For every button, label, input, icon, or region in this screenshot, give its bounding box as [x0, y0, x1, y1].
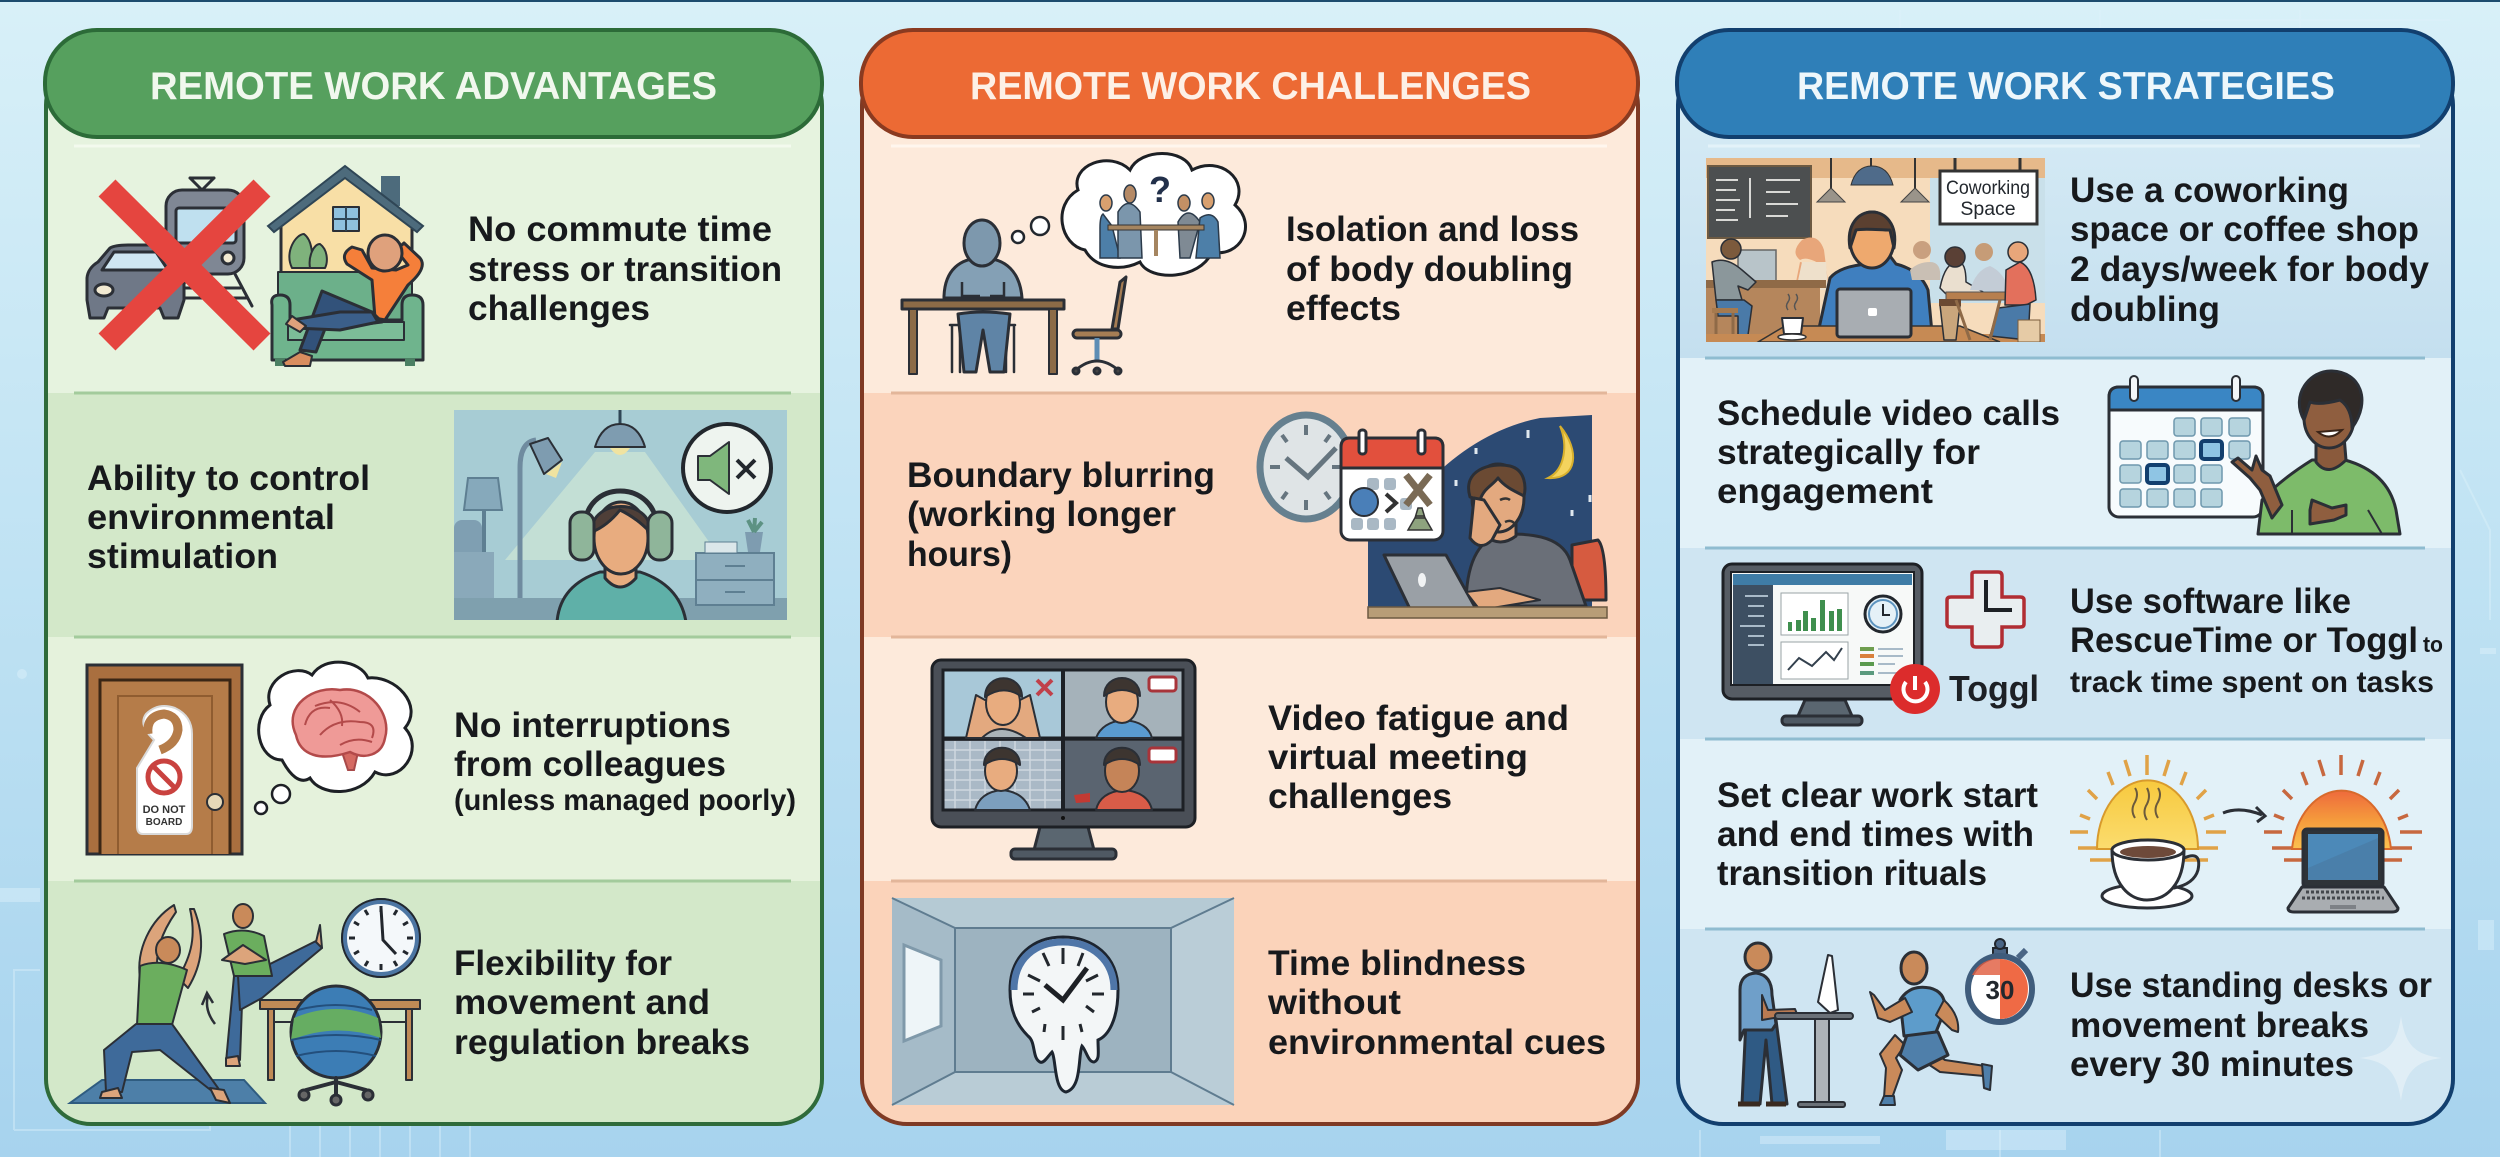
text: start and end: and end times with	[1717, 815, 2034, 854]
text: coworking: Use a coworking	[2070, 171, 2349, 210]
illustration: video call fatigue monitor	[932, 660, 1195, 859]
panel: strategies	[1676, 30, 2456, 1126]
text: start and end	[1717, 776, 2038, 893]
illustration: quiet room with headphones	[454, 410, 787, 622]
icon: muted speaker	[683, 424, 771, 512]
icon: door hanger and brain thought: DO NOT	[143, 804, 186, 816]
text: video calls	[1717, 394, 2060, 511]
text: flexibility: Flexibility for	[454, 944, 672, 983]
text: isolation: effects	[1286, 289, 1401, 328]
text: video fatigue: virtual meeting	[1268, 738, 1528, 777]
text: time blindness	[1267, 944, 1606, 1062]
text: isolation	[1286, 210, 1579, 328]
icon: morning coffee to laptop	[2070, 755, 2422, 912]
sign: coworking space	[1940, 158, 2037, 224]
illustration: time tracking dashboard	[1723, 564, 2039, 725]
sign: coworking space: Space	[1960, 198, 2016, 220]
icon: 30 minute stopwatch	[1968, 939, 2032, 1022]
text: flexibility	[454, 944, 750, 1062]
text: no commute	[468, 210, 782, 328]
text: video fatigue: Video fatigue and	[1268, 699, 1569, 738]
text: no commute: stress or transition	[468, 250, 782, 289]
icon: no commute, relaxing at home	[87, 166, 423, 366]
icon: isolated worker imagining a team: ?	[1149, 169, 1171, 210]
text: software: RescueTime or Toggl	[2070, 621, 2418, 660]
text: environmental control: environmental	[87, 498, 335, 537]
text: software: track time spent on tasks	[2070, 666, 2434, 699]
panel: challenges	[860, 30, 1640, 1126]
advantages header: REMOTE WORK ADVANTAGES	[150, 65, 717, 108]
illustration: melting clock in empty room	[892, 898, 1234, 1105]
text: boundary blurring: Boundary blurring	[907, 456, 1215, 495]
text: video calls: Schedule video calls	[1717, 394, 2060, 433]
sign: coworking space: Coworking	[1946, 177, 2030, 199]
text: software	[2070, 582, 2443, 699]
icon: toggl logo	[1890, 664, 2039, 714]
text: environmental control: Ability to control	[87, 459, 370, 498]
text: video calls: engagement	[1717, 472, 1933, 511]
text: time blindness: environmental cues	[1268, 1023, 1606, 1062]
text: isolation: Isolation and loss	[1286, 210, 1579, 249]
strategies header	[1677, 30, 2453, 137]
icon: movement and exercise ball	[70, 899, 420, 1105]
text: environmental control: stimulation	[87, 537, 278, 576]
text: no commute: No commute time	[468, 210, 772, 249]
text: coworking: space or coffee shop	[2070, 210, 2419, 249]
text: standing desks: Use standing desks or	[2070, 966, 2432, 1005]
text: standing desks	[2070, 966, 2432, 1084]
text: software: to	[2423, 632, 2443, 657]
text: coworking: 2 days/week for body	[2070, 250, 2430, 289]
icon: toggl logo: Toggl	[1949, 668, 2039, 709]
text: video fatigue	[1268, 699, 1569, 816]
text: coworking	[2070, 171, 2430, 329]
text: no commute: challenges	[468, 289, 650, 328]
text: video calls: strategically for	[1717, 433, 1980, 472]
text: no interruptions: No interruptions	[454, 706, 731, 745]
illustration: calendar and presenter	[2109, 371, 2400, 534]
text: no interruptions: (unless managed poorly)	[454, 784, 796, 817]
text: start and end: Set clear work start	[1717, 776, 2038, 815]
text: software: Use software like	[2070, 582, 2351, 621]
icon: door hanger and brain thought	[87, 662, 412, 854]
icon: isolated worker imagining a team	[902, 154, 1246, 374]
panel: advantages	[44, 30, 824, 1126]
icon: rescuetime cross	[1947, 572, 2024, 647]
text: standing desks: movement breaks	[2070, 1006, 2369, 1045]
text: no interruptions: from colleagues	[454, 745, 726, 784]
challenges header: REMOTE WORK CHALLENGES	[970, 65, 1531, 108]
text: time blindness: Time blindness	[1268, 944, 1526, 983]
text: start and end: transition rituals	[1717, 854, 1987, 893]
icon: 30 minute stopwatch: 30	[1986, 975, 2014, 1005]
illustration: coworking space	[1706, 158, 2045, 344]
text: flexibility: regulation breaks	[454, 1023, 750, 1062]
strategies header: REMOTE WORK STRATEGIES	[1797, 65, 2335, 108]
advantages header	[45, 30, 822, 137]
illustration: standing desk and movement	[1738, 939, 2032, 1107]
icon: door hanger and brain thought: BOARD	[146, 817, 182, 828]
text: no interruptions	[454, 706, 796, 817]
text: environmental control	[87, 459, 370, 576]
text: video fatigue: challenges	[1268, 777, 1452, 816]
text: flexibility: movement and	[454, 983, 710, 1022]
illustration: late night overwork	[1260, 415, 1607, 618]
text: boundary blurring: (working longer	[907, 495, 1176, 534]
text: boundary blurring: hours)	[907, 535, 1012, 574]
text: time blindness: without	[1267, 983, 1401, 1022]
text: standing desks: every 30 minutes	[2070, 1045, 2354, 1084]
challenges header	[861, 30, 1638, 137]
text: coworking: doubling	[2070, 290, 2220, 329]
text: boundary blurring	[907, 456, 1215, 574]
text: isolation: of body doubling	[1286, 250, 1573, 289]
